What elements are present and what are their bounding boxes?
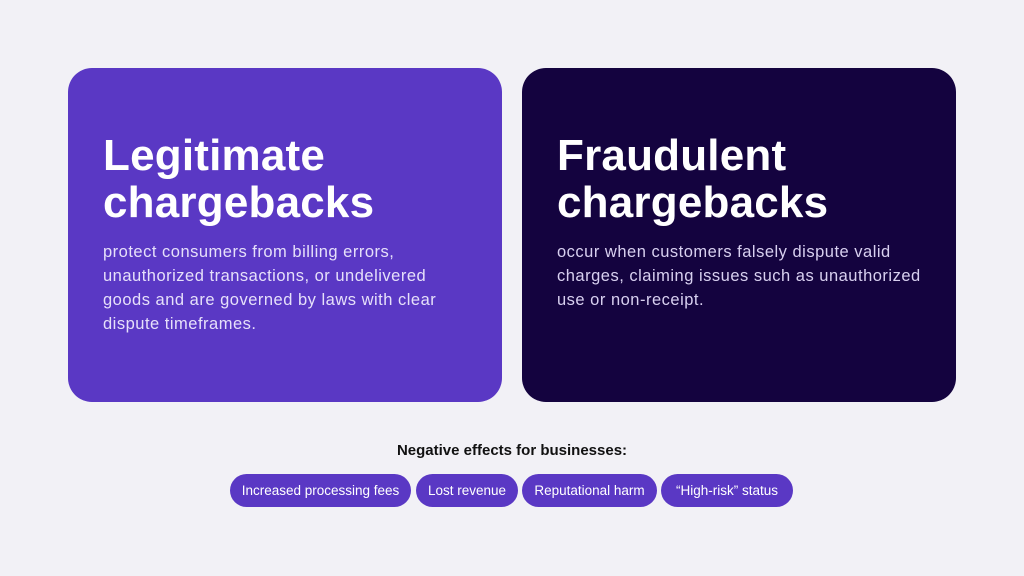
heading: fraudulent (557, 131, 828, 227)
panel: legitimate chargebacks (68, 68, 502, 402)
pill: lost revenue: Lost revenue (428, 483, 506, 498)
text: legitimate description: protect consumers from billing errors, (103, 243, 394, 261)
heading: fraudulent: Fraudulent (557, 131, 786, 180)
text: legitimate description: dispute timeframes. (103, 315, 256, 333)
text: legitimate description (103, 243, 436, 333)
text: fraudulent description: occur when customers falsely dispute valid (557, 243, 891, 261)
pill: reputational harm: Reputational harm (534, 483, 645, 498)
heading: legitimate (103, 131, 374, 227)
panel: fraudulent chargebacks (522, 68, 956, 402)
heading: legitimate: Legitimate (103, 131, 325, 180)
heading: legitimate: chargebacks (103, 178, 374, 227)
pill: increased processing fees (230, 474, 411, 507)
pill: lost revenue (416, 474, 518, 507)
pill: high-risk status: “High-risk” status (676, 483, 778, 498)
heading: fraudulent: chargebacks (557, 178, 828, 227)
pill: high-risk status (661, 474, 793, 507)
heading: negative effects: Negative effects for businesses: (397, 442, 627, 459)
text: legitimate description: unauthorized transactions, or undelivered (103, 267, 426, 285)
text: fraudulent description (557, 243, 921, 309)
text: fraudulent description: use or non-receipt. (557, 291, 704, 309)
pill: increased processing fees: Increased processing fees (242, 483, 399, 498)
text: legitimate description: goods and are governed by laws with clear (103, 291, 436, 309)
text: fraudulent description: charges, claiming issues such as unauthorized (557, 267, 921, 285)
pill: reputational harm (522, 474, 657, 507)
